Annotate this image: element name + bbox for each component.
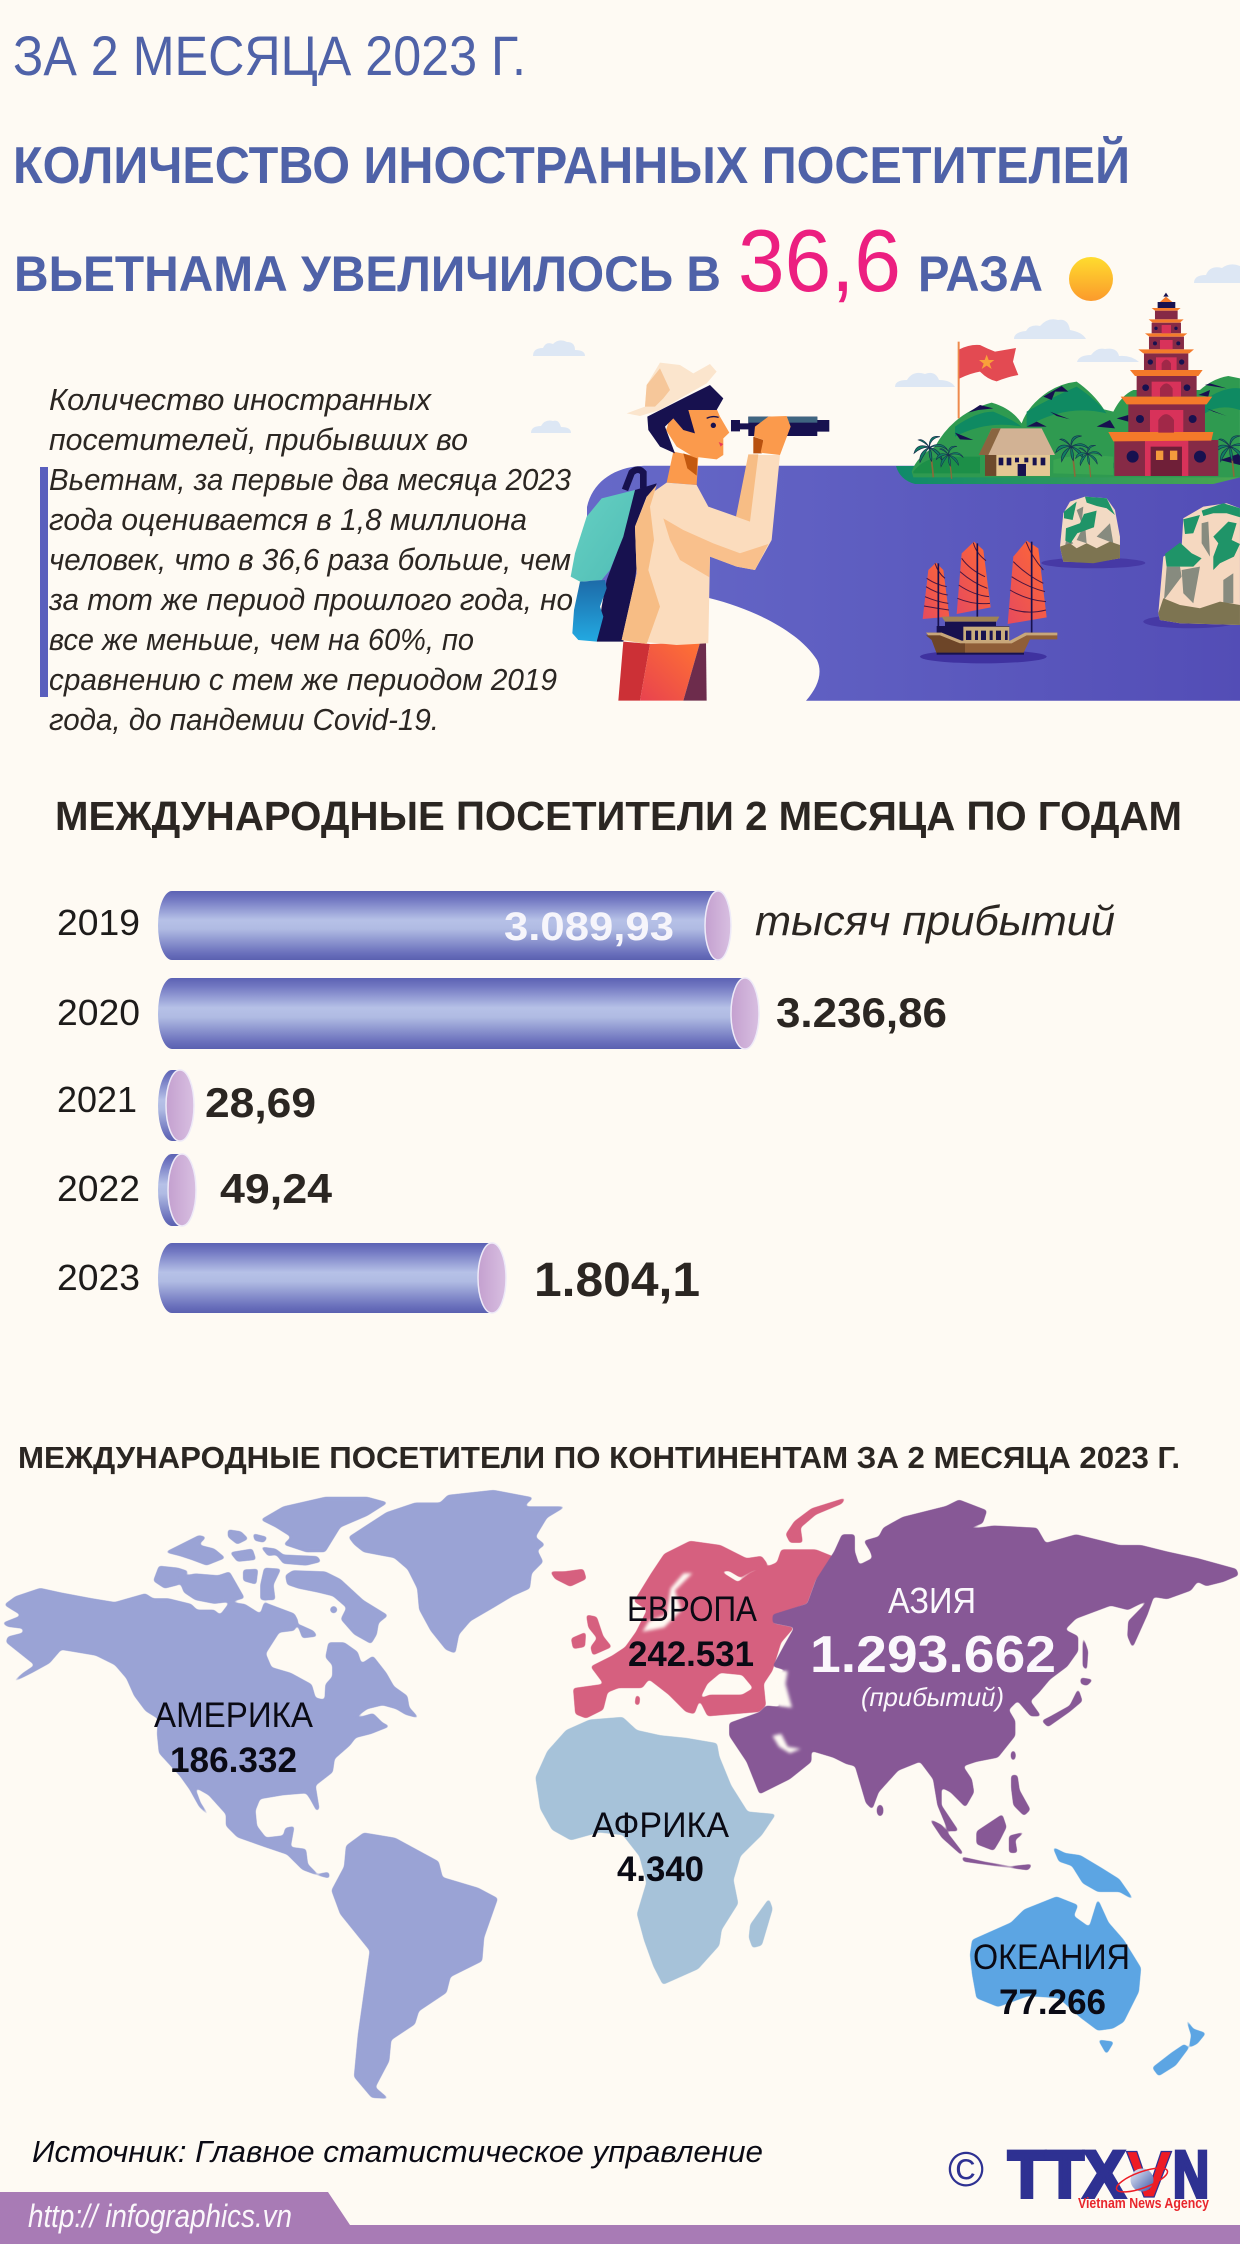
logo: TTXVN: TTX <box>1008 2137 1125 2211</box>
map: North America and Greenland <box>2 1490 566 1879</box>
label: Asia: (прибытий) <box>861 1682 1004 1712</box>
source note: Источник: Главное статистическое управление <box>32 2134 763 2169</box>
footer band <box>0 2192 1240 2244</box>
icon: sun <box>1069 257 1113 301</box>
illustration: bay with sea <box>587 466 1240 701</box>
label: Asia: 1.293.662 <box>810 1626 1056 1684</box>
label: America: АМЕРИКА <box>154 1696 314 1735</box>
text block: intro: Количество иностранных <box>49 382 432 417</box>
bar: 2019: 2019 <box>57 902 140 943</box>
illustration: limestone rocks <box>1041 497 1240 628</box>
shorts <box>618 642 650 701</box>
label: Oceania <box>973 1938 1130 2022</box>
hut <box>979 428 1055 455</box>
logo: TTXVN: N <box>1173 2137 1209 2211</box>
heading: bars by year: МЕЖДУНАРОДНЫЕ ПОСЕТИТЕЛИ 2 МЕСЯЦА ПО ГОДАМ <box>55 793 1182 839</box>
label: Africa: АФРИКА <box>592 1806 730 1845</box>
map: Oceania <box>970 1846 1206 2076</box>
text block: intro: посетителей, прибывших во <box>49 422 468 457</box>
label: America: 186.332 <box>170 1741 297 1780</box>
heading: map: МЕЖДУНАРОДНЫЕ ПОСЕТИТЕЛИ ПО КОНТИНЕНТАМ ЗА 2 МЕСЯЦА 2023 Г. <box>18 1440 1180 1475</box>
shirt <box>622 455 780 645</box>
bar: 2020 <box>57 978 947 1049</box>
logo: TTXVN: Vietnam News Agency <box>1078 2195 1210 2212</box>
label: Oceania: 77.266 <box>999 1983 1106 2022</box>
text block: intro: сравнению с тем же периодом 2019 <box>49 662 557 697</box>
map: Asia <box>729 1500 1239 1870</box>
text block: intro: года, до пандемии Covid-19. <box>49 702 439 737</box>
bar: 2023: 1.804,1 <box>534 1254 700 1307</box>
bar: 2023: 2023 <box>57 1257 140 1298</box>
label: Africa: 4.340 <box>617 1850 704 1889</box>
clouds <box>531 264 1240 433</box>
logo: TTXVN: V <box>1126 2137 1172 2211</box>
text block: intro: года оценивается в 1,8 миллиона <box>49 502 527 537</box>
head <box>666 405 729 459</box>
pagoda <box>1114 311 1218 476</box>
bar: 2021: 28,69 <box>205 1079 316 1126</box>
shore <box>896 466 1240 484</box>
text block: intro <box>40 382 573 737</box>
backpack <box>625 470 643 490</box>
text block: intro: за тот же период прошлого года, но <box>48 582 573 617</box>
bar: 2020: 2020 <box>57 992 140 1033</box>
title: main line 2: ВЬЕТНАМА УВЕЛИЧИЛОСЬ В <box>14 246 721 302</box>
hand <box>753 437 763 453</box>
bar chart: visitors by year <box>57 891 1115 1313</box>
bar: 2019 <box>57 891 731 960</box>
text block: intro: Вьетнам, за первые два месяца 2023 <box>49 462 571 497</box>
label: Europe <box>627 1590 758 1674</box>
bar: 2022: 49,24 <box>220 1165 333 1212</box>
label: Oceania: ОКЕАНИЯ <box>973 1938 1130 1977</box>
logo: TTXVN <box>1008 2137 1210 2212</box>
footer url: http:// infographics.vn <box>28 2198 292 2234</box>
bar: 2021 <box>57 1070 316 1141</box>
label: Asia <box>810 1580 1056 1712</box>
title: period line: ЗА 2 МЕСЯЦА 2023 Г. <box>13 24 526 87</box>
illustration: tourist with binoculars <box>571 363 829 701</box>
bar: 2022 <box>57 1154 333 1226</box>
icon: flag of Vietnam <box>958 342 1018 418</box>
unit label: тысяч прибытий <box>755 897 1115 944</box>
label: Europe: ЕВРОПА <box>627 1590 758 1629</box>
bar: 2020: 3.236,86 <box>776 989 947 1036</box>
label: Africa <box>592 1806 730 1889</box>
title: main line 2 <box>14 211 1043 310</box>
illustration: island with pagoda <box>896 293 1240 484</box>
map: South America <box>331 1833 498 2099</box>
hills <box>912 376 1240 477</box>
title: main line 2: 36,6 <box>738 211 901 310</box>
accent bar <box>40 467 48 697</box>
palms <box>914 436 948 477</box>
binoculars <box>731 417 829 436</box>
hat <box>627 363 717 416</box>
label: Asia: АЗИЯ <box>888 1580 976 1621</box>
bar: 2021: 2021 <box>57 1079 137 1120</box>
map: Europe <box>550 1497 846 1719</box>
label: Europe: 242.531 <box>628 1635 754 1674</box>
illustration: junk boat <box>920 541 1057 663</box>
bar: 2022: 2022 <box>57 1168 140 1209</box>
icon: copyright: © <box>948 2143 984 2197</box>
bar: 2019: 3.089,93 <box>504 905 674 949</box>
map: Africa <box>535 1717 776 1985</box>
bar: 2023 <box>57 1243 700 1313</box>
text block: intro: человек, что в 36,6 раза больше, чем <box>49 542 571 577</box>
text block: intro: все же меньше, чем на 60%, по <box>49 622 474 657</box>
title: main line 1: КОЛИЧЕСТВО ИНОСТРАННЫХ ПОСЕТИТЕЛЕЙ <box>13 136 1130 195</box>
label: America <box>154 1696 314 1780</box>
neck <box>667 452 698 485</box>
title: main line 2: РАЗА <box>918 246 1043 302</box>
